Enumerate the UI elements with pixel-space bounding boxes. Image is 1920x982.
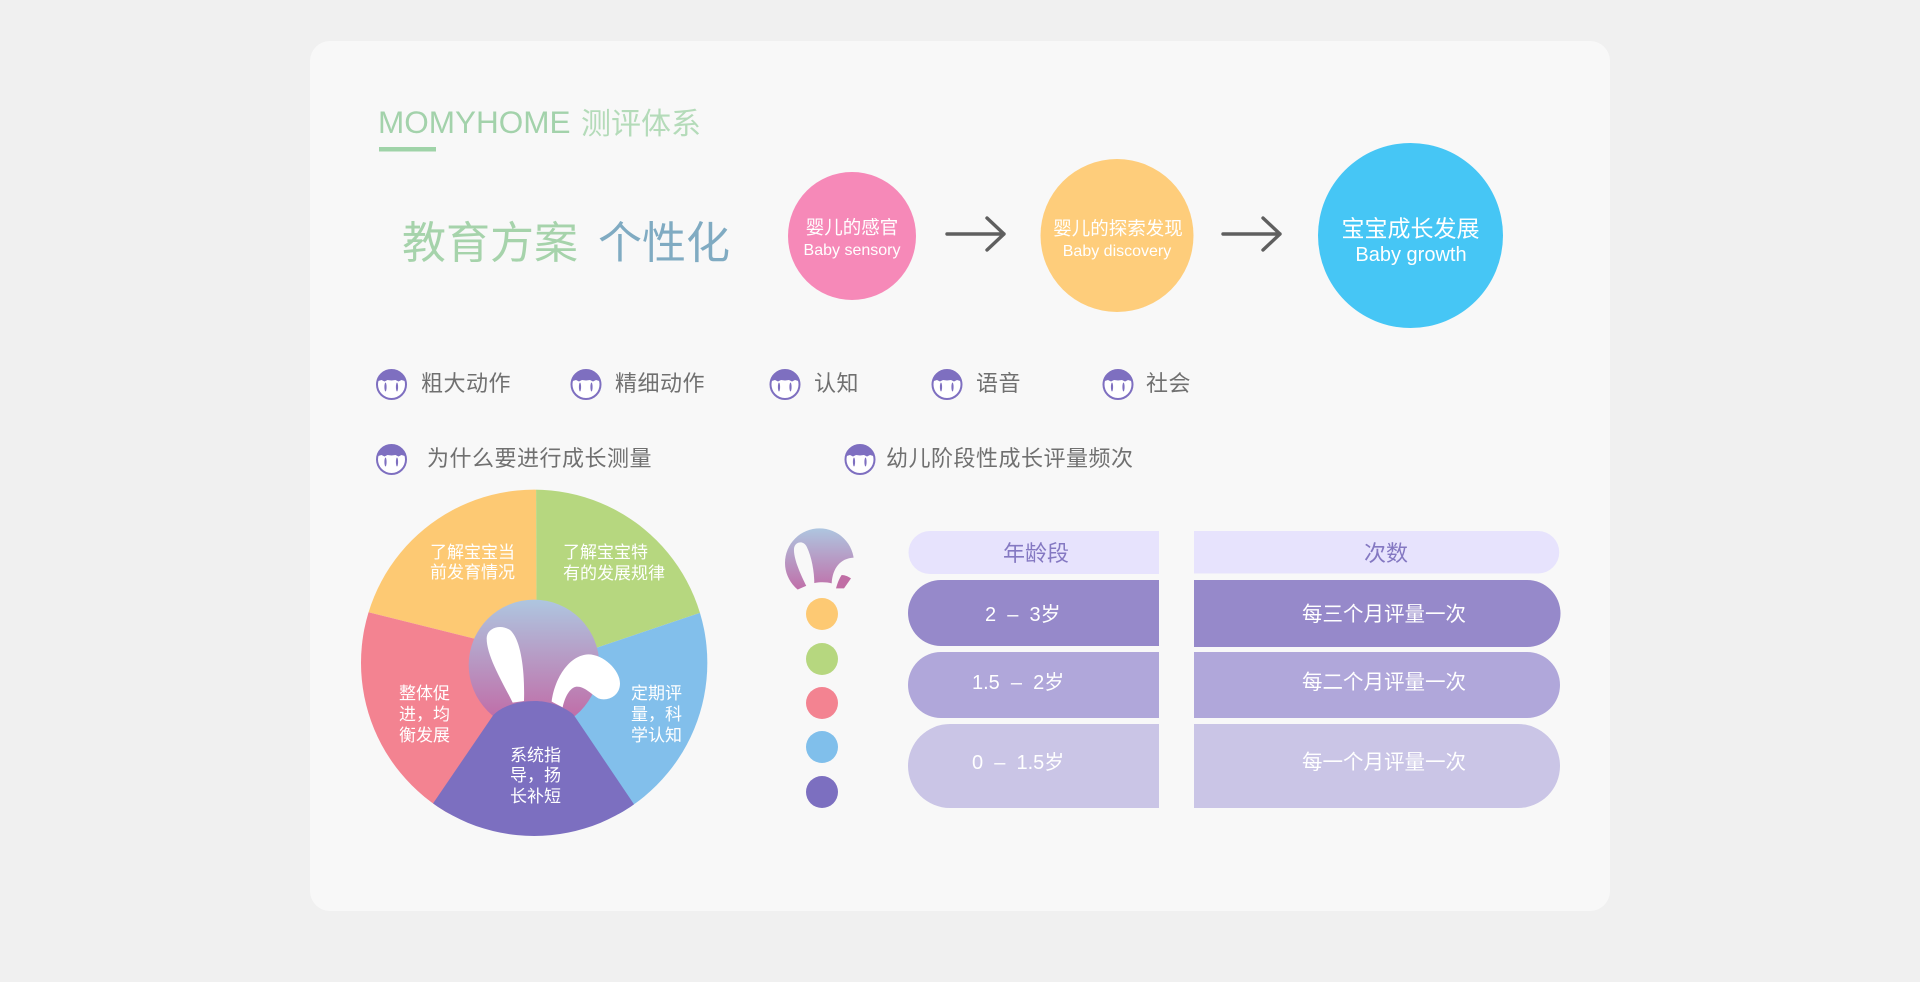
legend item: fine motor: [571, 370, 705, 399]
pie chart: reasons for measuring: 定期评: [631, 684, 682, 703]
heading: assessment frequency: 幼儿阶段性成长评量频次: [886, 446, 1134, 471]
arrow: sensory to discovery: [947, 218, 1004, 250]
legend item: language: [932, 370, 1021, 399]
legend item: cognition: 认知: [814, 371, 859, 396]
table header: age: 年龄段: [1003, 541, 1069, 566]
title: 测评体系: [581, 108, 701, 141]
circle: baby discovery: [1040, 159, 1194, 312]
dot: red: [806, 687, 838, 719]
circle: baby growth: [1318, 143, 1503, 328]
heading: personalised education plan: 个性化: [598, 219, 730, 268]
legend item: fine motor: 精细动作: [615, 371, 705, 396]
table row: 2-3 years: 每三个月评量一次: [1302, 603, 1466, 626]
title: [378, 104, 701, 152]
circle: baby discovery: Baby discovery: [1063, 243, 1171, 260]
dot: yellow: [806, 598, 838, 630]
table header: times: [1194, 531, 1559, 574]
circle: baby sensory: Baby sensory: [804, 242, 900, 259]
legend item: social: [1103, 370, 1191, 399]
table row: 2-3 years: [908, 580, 1560, 647]
pie chart: reasons for measuring: [361, 490, 708, 836]
pie chart: reasons for measuring: 进，均: [399, 705, 450, 724]
pie chart: reasons for measuring: 学认知: [631, 726, 682, 745]
heading: why measure growth: [376, 444, 652, 474]
table row: 2-3 years: 2 – 3岁: [985, 603, 1061, 626]
pie chart: reasons for measuring: 有的发展规律: [563, 564, 665, 583]
heading: why measure growth: 为什么要进行成长测量: [427, 446, 652, 471]
table header: age: [908, 531, 1159, 574]
legend item: cognition: [770, 370, 859, 399]
arrow: discovery to growth: [1223, 218, 1280, 250]
icon: small bunny: [785, 528, 880, 600]
table row: 0-1.5 years: 0 – 1.5岁: [972, 751, 1064, 774]
table row: 1.5-2 years: 1.5 – 2岁: [972, 671, 1064, 694]
dot: green: [806, 643, 838, 675]
circle: baby discovery: 婴儿的探索发现: [1053, 218, 1183, 239]
pie chart: reasons for measuring: 衡发展: [399, 726, 450, 745]
circle: baby growth: Baby growth: [1355, 244, 1467, 266]
legend item: social: 社会: [1146, 371, 1191, 396]
circle: baby sensory: [788, 172, 916, 300]
legend item: gross motor: 粗大动作: [421, 371, 511, 396]
heading: personalised education plan: [402, 219, 730, 268]
pie chart: reasons for measuring: 长补短: [510, 787, 561, 806]
pie chart: reasons for measuring: 了解宝宝当: [430, 543, 515, 562]
dot: purple: [806, 776, 838, 808]
pie chart: reasons for measuring: 系统指: [510, 746, 561, 765]
heading: personalised education plan: 教育方案: [402, 219, 578, 268]
table header: times: 次数: [1364, 541, 1408, 566]
circle: baby growth: 宝宝成长发展: [1342, 216, 1480, 242]
panel: main card: [310, 41, 1610, 911]
table row: 1.5-2 years: [908, 652, 1560, 718]
pie chart: reasons for measuring: 量，科: [631, 705, 682, 724]
legend item: gross motor: [376, 370, 511, 399]
circle: baby sensory: 婴儿的感官: [806, 217, 898, 238]
legend item: language: 语音: [976, 371, 1021, 396]
table row: 0-1.5 years: [908, 724, 1560, 808]
dot: blue: [806, 731, 838, 763]
table row: 1.5-2 years: 每二个月评量一次: [1302, 671, 1466, 694]
pie chart: reasons for measuring: 了解宝宝特: [563, 543, 648, 562]
title: MOMYHOME: [378, 104, 570, 140]
pie chart: reasons for measuring: 整体促: [399, 684, 450, 703]
pie chart: reasons for measuring: 前发育情况: [430, 563, 515, 582]
table row: 0-1.5 years: 每一个月评量一次: [1302, 751, 1466, 774]
pie chart: reasons for measuring: 导，扬: [510, 766, 561, 785]
